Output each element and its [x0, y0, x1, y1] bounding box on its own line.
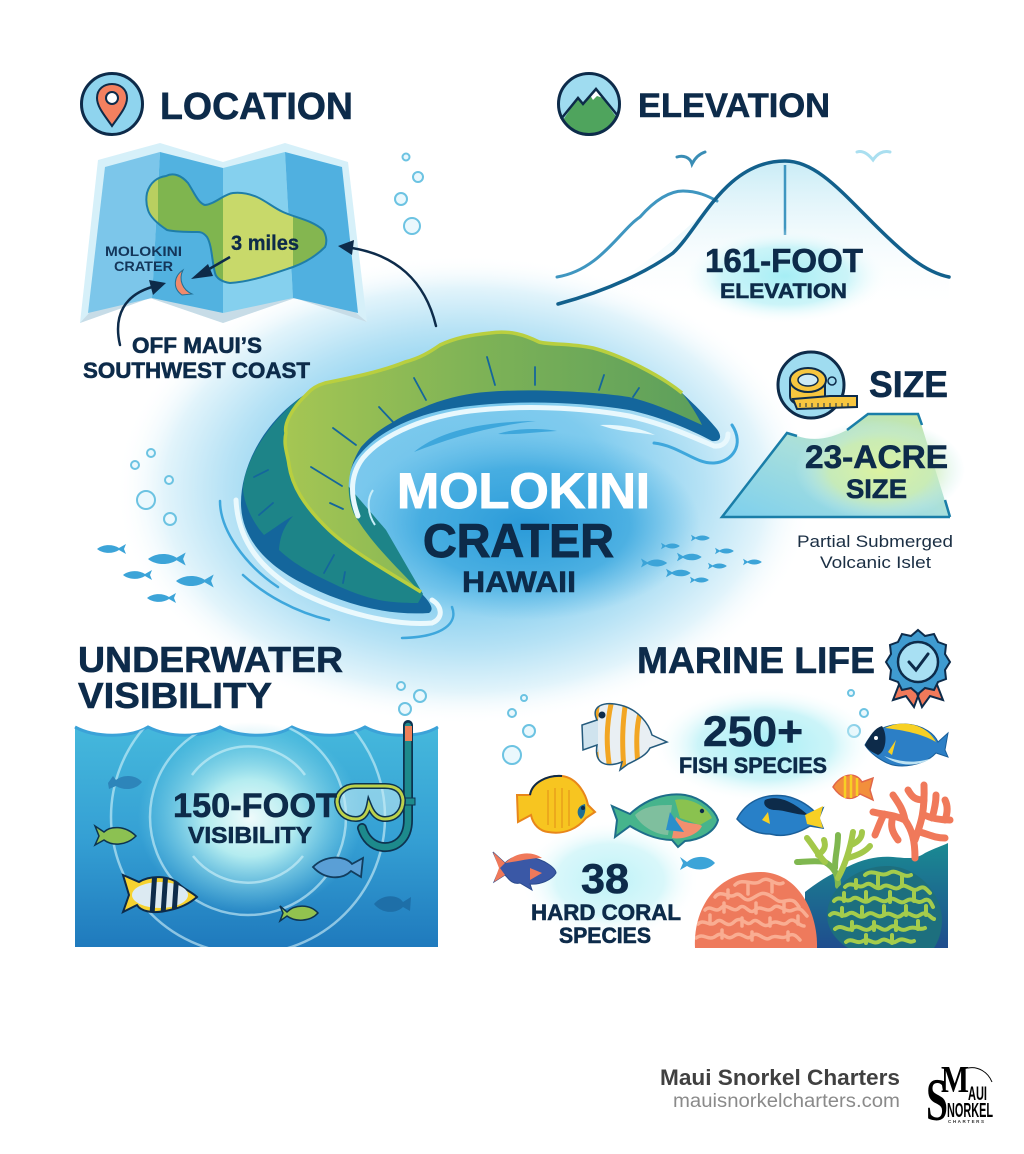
foam outline	[236, 500, 440, 623]
coral species figure	[520, 820, 700, 948]
location label: SOUTHWEST COAST	[83, 358, 311, 383]
fish: copperband butterfly	[582, 700, 667, 770]
yellow ridge line	[285, 332, 682, 592]
reef background	[805, 843, 948, 948]
panel: location	[80, 74, 367, 383]
heading: underwater visibility: UNDERWATER	[78, 639, 343, 680]
water scene	[74, 725, 439, 947]
map labels: MOLOKINI	[105, 243, 182, 259]
elevation figure: ELEVATION	[720, 280, 847, 303]
outer teal slope	[243, 393, 423, 603]
title: Molokini Crater Hawaii: MOLOKINI	[397, 463, 650, 519]
size caption	[797, 532, 953, 572]
title: Molokini Crater Hawaii	[397, 463, 650, 599]
logo: S	[926, 1067, 948, 1133]
visibility figure	[173, 787, 337, 848]
panel: marine life	[493, 630, 950, 948]
fish species figure: FISH SPECIES	[679, 753, 827, 778]
size caption: Partial Submerged	[797, 532, 953, 551]
footer text: Maui Snorkel Charters	[660, 1065, 900, 1090]
heading: underwater visibility	[78, 639, 343, 716]
decorative fish schools	[97, 535, 762, 603]
map labels: 3 miles	[231, 232, 299, 255]
arrow: distance	[191, 257, 230, 279]
map: crater marker	[175, 270, 192, 295]
elevation figure: 161-FOOT	[705, 242, 863, 279]
location label	[83, 333, 311, 383]
water swooshes	[220, 425, 737, 638]
fish: small blue	[680, 857, 715, 870]
logo: AUI	[968, 1084, 987, 1105]
size figure: 23-ACRE	[805, 439, 948, 475]
coral: orange brain	[695, 872, 817, 948]
crescent base	[241, 332, 720, 613]
panel: underwater visibility	[75, 639, 438, 954]
icon: birds	[677, 151, 890, 164]
icon: award badge	[886, 630, 950, 707]
footer text: mauisnorkelcharters.com	[673, 1091, 900, 1112]
central crater illustration	[220, 332, 737, 638]
fish: blue tang	[737, 795, 823, 835]
heading: location: LOCATION	[160, 86, 353, 128]
map labels: CRATER	[114, 258, 173, 274]
icon: tape measure	[778, 352, 857, 418]
panel: elevation	[557, 74, 949, 324]
fish species figure	[653, 687, 877, 803]
green ridge	[285, 332, 702, 593]
arrow: crater to map	[338, 240, 436, 326]
size figure: SIZE	[846, 474, 907, 504]
lagoon highlights	[369, 421, 655, 525]
coral: green branching	[797, 832, 870, 886]
coral species figure: HARD CORAL	[531, 900, 681, 925]
ridge ticks	[254, 357, 639, 583]
location label: OFF MAUI’S	[132, 333, 262, 358]
visibility figure: VISIBILITY	[188, 822, 312, 848]
heading: size: SIZE	[869, 364, 948, 405]
heading: underwater visibility: VISIBILITY	[78, 675, 272, 716]
fish: purple wrasse	[493, 852, 556, 890]
panel: size	[722, 352, 965, 572]
fish: small orange	[833, 775, 873, 800]
size caption: Volcanic Islet	[820, 553, 931, 572]
logo	[926, 1059, 993, 1133]
elevation figure	[680, 228, 890, 324]
elevation chart	[557, 161, 949, 310]
fish: striped angelfish	[123, 870, 197, 915]
fish: green small	[280, 906, 318, 921]
fish: green	[95, 826, 136, 845]
fish species figure: 250+	[703, 708, 803, 756]
lagoon rim	[353, 408, 728, 516]
footer: brand	[660, 1059, 993, 1133]
fish: parrotfish	[612, 794, 718, 847]
logo: M	[941, 1059, 969, 1101]
coral: green brain	[827, 866, 942, 948]
folded map	[80, 143, 367, 323]
icon: mountain	[558, 74, 620, 136]
map: Maui island	[145, 173, 328, 284]
title: Molokini Crater Hawaii: HAWAII	[462, 566, 576, 599]
logo: CHARTERS	[948, 1119, 984, 1124]
footer text	[660, 1065, 900, 1112]
fish: powder blue tang	[865, 724, 948, 766]
icon: snorkel and mask	[337, 725, 415, 847]
islet cross-section	[722, 414, 965, 520]
title: Molokini Crater Hawaii: CRATER	[423, 514, 614, 567]
coral species figure: SPECIES	[559, 923, 651, 948]
fish: dark silhouette	[374, 896, 411, 912]
background glow	[115, 255, 815, 725]
heading: elevation: ELEVATION	[638, 87, 830, 125]
fish: blue	[313, 858, 363, 877]
fish: silhouette	[108, 776, 142, 789]
heading: marine life: MARINE LIFE	[637, 640, 875, 681]
visibility figure: 150-FOOT	[173, 787, 337, 825]
coral species figure: 38	[581, 855, 629, 902]
arrow: coast to crater	[118, 280, 166, 345]
size figure	[805, 439, 948, 504]
coral: orange branching	[873, 785, 950, 858]
icon: map pin	[82, 74, 142, 134]
bubbles	[131, 154, 868, 764]
map labels	[105, 232, 299, 274]
fish: yellow butterfly	[517, 776, 595, 833]
